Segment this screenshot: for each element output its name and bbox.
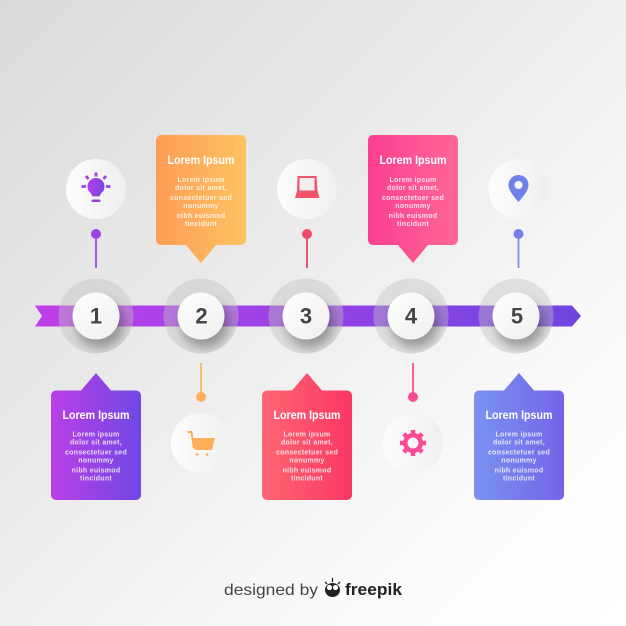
- callout: step 4: nibh euismod: [389, 213, 437, 220]
- callout: step 5: dolor sit amet,: [493, 440, 545, 446]
- callout: step 2: Lorem Ipsum: [168, 155, 234, 167]
- callout: step 1: consectetuer sed: [65, 450, 127, 456]
- callout: step 1: nonummy: [78, 458, 114, 464]
- callout: step 1: dolor sit amet,: [70, 440, 122, 446]
- callout: step 3: dolor sit amet,: [281, 440, 333, 446]
- callout: step 1: nibh euismod: [72, 468, 120, 474]
- step 4 marker: 4: [405, 304, 418, 328]
- step 3 marker: 3: [300, 304, 312, 328]
- callout: step 2: Lorem ipsum: [177, 177, 225, 184]
- callout: step 3: Lorem Ipsum: [274, 410, 340, 422]
- icon: light bulb: [66, 159, 126, 219]
- callout: step 2: tincidunt: [185, 221, 217, 228]
- pin 5: [514, 229, 524, 268]
- callout: step 2: dolor sit amet,: [175, 185, 227, 192]
- callout: step 2: nibh euismod: [177, 213, 225, 220]
- step 2 marker: 2: [195, 304, 208, 328]
- icon: map pin: [488, 159, 548, 219]
- callout: step 2: consectetuer sed: [170, 195, 232, 202]
- attribution: designed by freepik: [224, 578, 403, 599]
- attribution: designed by freepik: freepik: [345, 580, 403, 599]
- attribution: designed by freepik: designed by: [224, 582, 318, 599]
- step 1 marker: [58, 278, 134, 354]
- callout: step 3: Lorem ipsum: [283, 432, 331, 438]
- step 4 marker: [374, 278, 448, 354]
- callout: step 2: nonummy: [183, 203, 219, 210]
- callout: step 5: nonummy: [501, 458, 537, 464]
- callout: step 3: [262, 373, 352, 500]
- timeline ribbon: [35, 306, 581, 326]
- callout: step 4: dolor sit amet,: [387, 185, 439, 192]
- pin 1: [91, 229, 101, 268]
- callout: step 5: nibh euismod: [495, 468, 543, 474]
- callout: step 5: tincidunt: [503, 476, 535, 482]
- icon: shopping cart: [171, 413, 231, 473]
- callout: step 1: Lorem ipsum: [72, 432, 120, 438]
- pin 3: [302, 229, 312, 268]
- callout: step 3: nonummy: [289, 458, 325, 464]
- callout: step 4: tincidunt: [397, 221, 429, 228]
- callout: step 5: [474, 373, 564, 500]
- callout: step 4: Lorem Ipsum: [380, 155, 446, 167]
- icon: laptop: [277, 159, 337, 219]
- callout: step 1: tincidunt: [80, 476, 112, 482]
- callout: step 1: Lorem Ipsum: [62, 410, 130, 422]
- callout: step 4: nonummy: [395, 203, 431, 210]
- pin 4: [408, 363, 418, 402]
- step 5 marker: [478, 278, 554, 354]
- step 5 marker: 5: [511, 304, 523, 328]
- step 1 marker: 1: [90, 304, 102, 328]
- callout: step 5: Lorem Ipsum: [486, 410, 552, 422]
- step 3 marker: [268, 278, 344, 354]
- callout: step 5: Lorem ipsum: [495, 432, 543, 438]
- callout: step 4: [368, 135, 458, 263]
- callout: step 3: tincidunt: [291, 476, 323, 482]
- callout: step 1: [51, 373, 141, 500]
- callout: step 4: Lorem ipsum: [389, 177, 437, 184]
- callout: step 2: [156, 135, 246, 263]
- callout: step 3: consectetuer sed: [276, 450, 338, 456]
- step 2 marker: [164, 278, 238, 354]
- icon: gear: [383, 413, 443, 473]
- callout: step 3: nibh euismod: [283, 468, 331, 474]
- callout: step 5: consectetuer sed: [488, 450, 550, 456]
- pin 2: [196, 363, 206, 402]
- callout: step 4: consectetuer sed: [382, 195, 444, 202]
